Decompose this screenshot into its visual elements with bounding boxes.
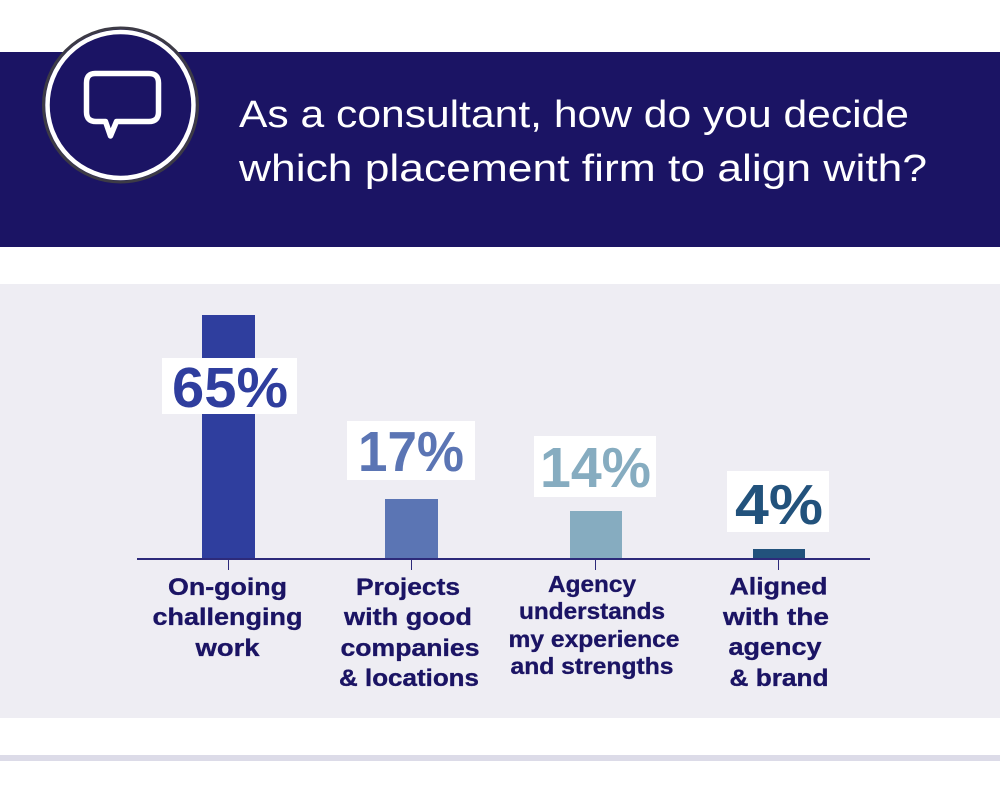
label: projects with good companies and locations: & locations	[339, 665, 479, 692]
bar: 4%	[727, 471, 829, 559]
label: agency understands my experience and strengths: my experience	[508, 626, 680, 652]
panel: chart background	[0, 284, 1000, 718]
label: projects with good companies and locations: companies	[340, 635, 480, 662]
footer rule	[0, 755, 1000, 761]
bar: 14%: 14%	[540, 436, 651, 500]
label: on-going challenging work: On-going	[168, 574, 287, 601]
bar: 65%	[162, 315, 297, 559]
label: on-going challenging work: work	[194, 635, 260, 662]
label: agency understands my experience and strengths	[508, 571, 680, 679]
bar: 4%: 4%	[735, 473, 823, 537]
icon: speech bubble in circle	[44, 28, 198, 182]
axis	[137, 558, 870, 570]
label: on-going challenging work	[152, 574, 302, 662]
bar: 65%: 65%	[172, 356, 288, 420]
title: As a consultant, how do you decide	[239, 94, 909, 136]
bar: 17%: 17%	[358, 420, 464, 484]
label: aligned with the agency and brand: Aligned	[730, 574, 828, 600]
label: aligned with the agency and brand: & brand	[730, 665, 828, 692]
header banner: which placement firm to align with?	[238, 148, 927, 190]
label: agency understands my experience and strengths: Agency	[548, 571, 636, 597]
bar: 17%	[347, 420, 475, 559]
label: projects with good companies and locations: Projects	[356, 574, 460, 601]
bar chart	[137, 315, 870, 692]
bar: 14%	[534, 436, 656, 559]
header banner	[0, 28, 1000, 247]
label: aligned with the agency and brand: agency	[728, 634, 822, 661]
label: agency understands my experience and strengths: understands	[519, 598, 665, 624]
label: on-going challenging work: challenging	[152, 604, 302, 631]
label: projects with good companies and locations: with good	[343, 604, 472, 631]
label: agency understands my experience and strengths: and strengths	[510, 653, 674, 679]
label: aligned with the agency and brand	[722, 574, 829, 692]
label: projects with good companies and locations	[339, 574, 480, 692]
label: aligned with the agency and brand: with the	[722, 604, 829, 631]
